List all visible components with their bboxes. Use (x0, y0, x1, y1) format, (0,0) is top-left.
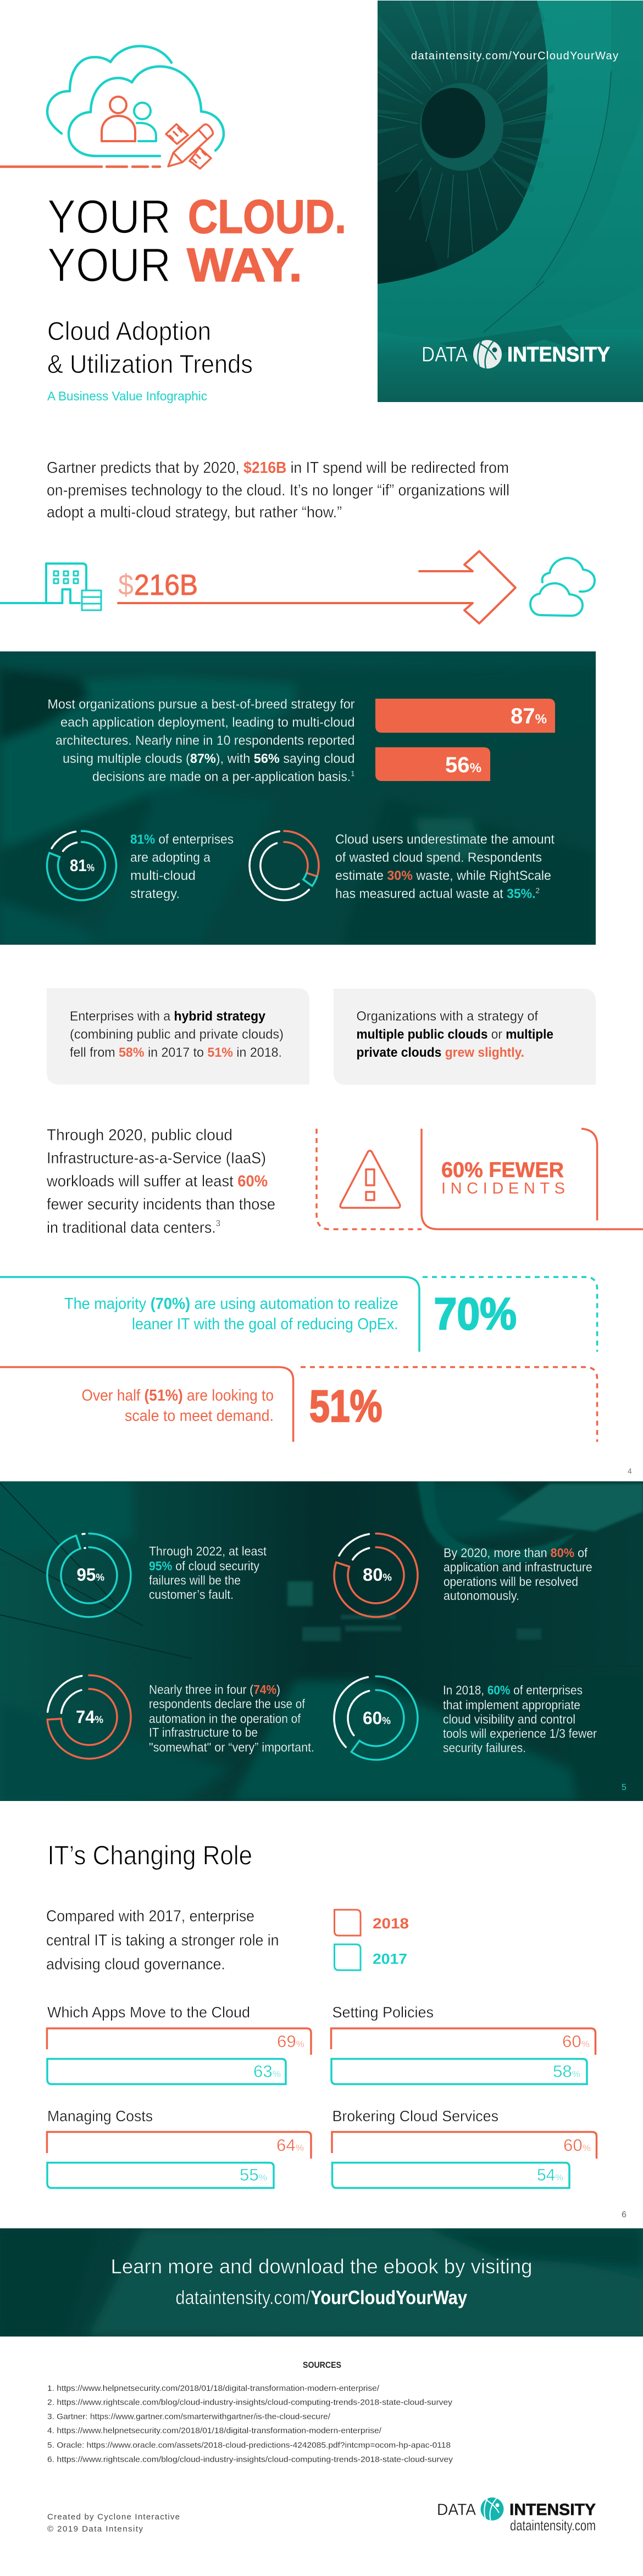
text: 95% security failures: Through 2022, at least (149, 1544, 267, 1558)
panel: call to action: Learn more and download the ebook by visiting (111, 2255, 532, 2278)
chart: setting policies: Setting Policies (332, 2004, 434, 2021)
legend: 2017 (373, 1951, 407, 1967)
callout: 70% automation: leaner IT with the goal of reducing OpEx. (132, 1315, 398, 1333)
title: WAY. (187, 239, 302, 292)
logo: data intensity white: DATA (422, 343, 468, 366)
chart: setting policies (331, 2004, 596, 2084)
text: wasted cloud spend: has measured actual waste at 35%. (335, 886, 537, 901)
list: sources (47, 2384, 453, 2465)
heading: sources: SOURCES (303, 2361, 341, 2370)
intro paragraph: adopt a multi-cloud strategy, but rather “how.” (47, 504, 342, 521)
legend: 2018 (373, 1915, 409, 1932)
bar: 56%: 56% (445, 753, 481, 777)
chart: brokering cloud services: 54% (537, 2165, 563, 2184)
donut: 74%: 74% (76, 1707, 103, 1727)
hero url: dataintensity.com/YourCloudYourWay (411, 50, 618, 62)
donut: 80%: 80% (363, 1565, 392, 1585)
logo: data intensity white (422, 340, 610, 369)
text: 95% security failures (149, 1544, 267, 1602)
text: multi-cloud paragraph: each application deployment, leading to multi-cloud (60, 715, 355, 730)
chart: which apps move to the cloud: 63% (253, 2062, 281, 2081)
panel: hybrid strategy: (combining public and private clouds) (70, 1027, 284, 1042)
panel: call to action (0, 2228, 643, 2337)
callout: 51% scale (0, 1367, 597, 1442)
callout: 60% fewer incidents (317, 1129, 643, 1229)
text: 95% security failures: 95% of cloud security (149, 1559, 259, 1573)
subtitle: & Utilization Trends (47, 349, 253, 378)
text: 80% autonomous: autonomously. (444, 1588, 519, 1603)
chart: managing costs (47, 2107, 311, 2188)
page number 4: 4 (628, 1467, 632, 1475)
panel: port photo background (0, 651, 596, 945)
subtitle: Cloud Adoption (47, 316, 211, 345)
title: YOUR (47, 191, 171, 243)
donut: 60%: 60% (363, 1708, 391, 1728)
chart: which apps move to the cloud: Which Apps Move to the Cloud (47, 2004, 250, 2021)
text: security incidents: Through 2020, public cloud (47, 1127, 232, 1144)
legend (334, 1910, 409, 1970)
intro paragraph: Gartner predicts that by 2020, $216B in IT spend will be redirected from (47, 459, 509, 477)
panel: hybrid strategy (47, 988, 309, 1084)
text: security incidents: 3 (216, 1219, 220, 1229)
panel: multiple clouds (334, 989, 596, 1085)
logo: data intensity footer: INTENSITY (509, 2501, 596, 2519)
page number 5: 5 (622, 1783, 627, 1792)
text: 60% visibility: In 2018, 60% of enterprises (443, 1683, 583, 1697)
text: 60% visibility (443, 1683, 597, 1755)
orange dashed rule (0, 165, 160, 168)
title: CLOUD. (188, 191, 346, 243)
page number 6: 6 (622, 2210, 627, 2220)
heading: IT's changing role: IT’s Changing Role (47, 1841, 252, 1871)
chart: setting policies: 58% (553, 2062, 580, 2081)
text: 74% automation: automation in the operation of (149, 1711, 301, 1726)
text: 81% of enterprises: strategy. (130, 886, 180, 901)
donut: 95% (47, 1534, 131, 1617)
panel: multiple clouds: Organizations with a strategy of (356, 1009, 538, 1024)
callout: 51% scale: Over half (51%) are looking to (81, 1387, 274, 1404)
chart: managing costs: Managing Costs (47, 2107, 153, 2125)
intro paragraph: on-premises technology to the cloud. It’s no longer “if” organizations will (47, 482, 509, 499)
list: sources: 5. Oracle: https://www.oracle.com/assets/2018-cloud-predictions-4242085.pdf?intcmp=ocom-hp-apac-0118 (47, 2441, 451, 2450)
donut: 60% (334, 1676, 418, 1760)
chart: setting policies: 60% (562, 2032, 590, 2051)
text: 74% automation: IT infrastructure to be (149, 1725, 258, 1739)
text: 80% autonomous: operations will be resolved (444, 1575, 578, 1589)
text: 80% autonomous: application and infrastructure (444, 1560, 592, 1574)
figure: $216B: 216B (134, 569, 198, 601)
text: wasted cloud spend: Cloud users underestimate the amount (335, 832, 555, 847)
panel: call to action: dataintensity.com/YourCloudYourWay (175, 2287, 467, 2309)
list: sources: 4. https://www.helpnetsecurity.com/2018/01/18/digital-transformation-modern-enterprise/ (47, 2426, 382, 2435)
credits (47, 2512, 180, 2534)
callout: 51% scale: 51% (309, 1381, 383, 1431)
icon: building and server (0, 564, 101, 610)
text: 95% security failures: failures will be the (149, 1573, 241, 1587)
text: 81% of enterprises (130, 832, 234, 901)
panel: hybrid strategy: fell from 58% in 2017 to 51% in 2018. (70, 1045, 282, 1060)
list: sources: 3. Gartner: https://www.gartner.com/smarterwithgartner/is-the-cloud-secure/ (47, 2412, 331, 2422)
text: 95% security failures: customer’s fault. (149, 1587, 234, 1602)
callout: 70% automation: The majority (70%) are using automation to realize (64, 1295, 398, 1313)
title: YOUR (47, 239, 171, 292)
callout: 70% automation (0, 1277, 597, 1352)
text: multi-cloud paragraph (47, 697, 355, 784)
tagline: A Business Value Infographic (47, 389, 207, 403)
panel: hybrid strategy: Enterprises with a hybrid strategy (70, 1009, 266, 1024)
arrow (118, 551, 515, 623)
text: security incidents: workloads will suffer at least 60% (46, 1173, 268, 1190)
subtitle (47, 316, 253, 378)
bar: 56% (375, 747, 490, 781)
logo: data intensity white: INTENSITY (507, 343, 610, 366)
bar: 87% (375, 699, 555, 733)
text: 60% visibility: security failures. (443, 1741, 526, 1755)
chart: brokering cloud services: Brokering Cloud Services (332, 2107, 498, 2125)
callout: 60% fewer incidents: INCIDENTS (441, 1180, 565, 1197)
donut: 74% (47, 1675, 131, 1759)
chart: which apps move to the cloud: 69% (277, 2032, 304, 2051)
donut: 80% (334, 1534, 418, 1617)
bar: 87%: 87% (511, 704, 547, 728)
list: sources: 6. https://www.rightscale.com/blog/cloud-industry-insights/cloud-computing-trends-2018-state-cloud-survey (47, 2455, 453, 2465)
text: wasted cloud spend: of wasted cloud spend. Respondents (335, 850, 542, 865)
text: 80% autonomous (444, 1546, 592, 1603)
chart: brokering cloud services: 60% (563, 2135, 591, 2155)
text: 74% automation: Nearly three in four (74%) (149, 1682, 280, 1697)
text: 60% visibility: cloud visibility and control (443, 1712, 575, 1726)
figure: $216B: $ (118, 569, 134, 601)
donut: 81% (47, 831, 116, 900)
panel: multiple clouds: multiple public clouds or multiple (356, 1027, 553, 1042)
credits: © 2019 Data Intensity (47, 2524, 143, 2534)
chart: brokering cloud services (332, 2107, 597, 2188)
text: governance paragraph: advising cloud governance. (46, 1956, 225, 1973)
text: multi-cloud paragraph: Most organizations pursue a best-of-breed strategy for (47, 697, 355, 712)
text: security incidents: in traditional data centers. (47, 1219, 229, 1237)
panel: station photo background (0, 1481, 643, 1801)
text: wasted cloud spend (335, 832, 555, 901)
donut: 81%: 81% (70, 856, 95, 875)
donut: 95%: 95% (77, 1565, 104, 1585)
chart: managing costs: 55% (240, 2165, 267, 2184)
text: multi-cloud paragraph: decisions are made on a per-application basis. (92, 770, 364, 784)
logo: data intensity footer (437, 2497, 596, 2534)
title (47, 191, 346, 292)
list: sources: 1. https://www.helpnetsecurity.com/2018/01/18/digital-transformation-modern-enterprise/ (47, 2384, 380, 2393)
text: 81% of enterprises: 81% of enterprises (130, 832, 234, 847)
text: security incidents: Infrastructure-as-a-Service (IaaS) (47, 1150, 266, 1167)
logo: data intensity footer: dataintensity.com (510, 2517, 596, 2534)
text: 60% visibility: tools will experience 1/3 fewer (443, 1726, 597, 1741)
text: wasted cloud spend: 2 (536, 886, 540, 895)
chart: which apps move to the cloud (47, 2004, 311, 2084)
text: multi-cloud paragraph: architectures. Nearly nine in 10 respondents reported (56, 733, 355, 748)
intro paragraph (47, 459, 509, 521)
callout: 70% automation: 70% (434, 1289, 517, 1339)
credits: Created by Cyclone Interactive (47, 2512, 180, 2522)
logo: data intensity footer: DATA (437, 2501, 476, 2519)
chart: managing costs: 64% (276, 2135, 304, 2155)
text: 81% of enterprises: are adopting a (130, 850, 211, 865)
text: 74% automation: "somewhat" or “very” important. (149, 1740, 314, 1754)
text: governance paragraph: central IT is taking a stronger role in (46, 1932, 279, 1949)
callout: 51% scale: scale to meet demand. (125, 1407, 274, 1425)
text: multi-cloud paragraph: using multiple clouds (87%), with 56% saying cloud (63, 751, 355, 766)
text: 81% of enterprises: multi-cloud (130, 868, 196, 883)
text: 80% autonomous: By 2020, more than 80% of (444, 1546, 588, 1560)
donut: 30% vs 35% waste (250, 831, 319, 900)
text: governance paragraph (46, 1908, 279, 1973)
text: security incidents (46, 1127, 275, 1237)
panel: multiple clouds: private clouds grew slightly. (356, 1045, 524, 1060)
text: governance paragraph: Compared with 2017, enterprise (46, 1908, 254, 1925)
list: sources: 2. https://www.rightscale.com/blog/cloud-industry-insights/cloud-computing-trends-2018-state-cloud-survey (47, 2398, 453, 2407)
text: wasted cloud spend: estimate 30% waste, while RightScale (335, 868, 551, 883)
text: multi-cloud paragraph: 1 (351, 769, 355, 778)
text: 60% visibility: that implement appropriate (443, 1698, 580, 1712)
text: security incidents: fewer security incidents than those (47, 1196, 275, 1213)
callout: 60% fewer incidents: 60% FEWER (441, 1158, 564, 1182)
text: 74% automation: respondents declare the use of (149, 1697, 306, 1711)
icon: cloud with people and tools (47, 46, 224, 169)
panel: hero engine photo (378, 1, 643, 402)
icon: clouds (530, 558, 595, 616)
text: 74% automation (149, 1682, 314, 1754)
